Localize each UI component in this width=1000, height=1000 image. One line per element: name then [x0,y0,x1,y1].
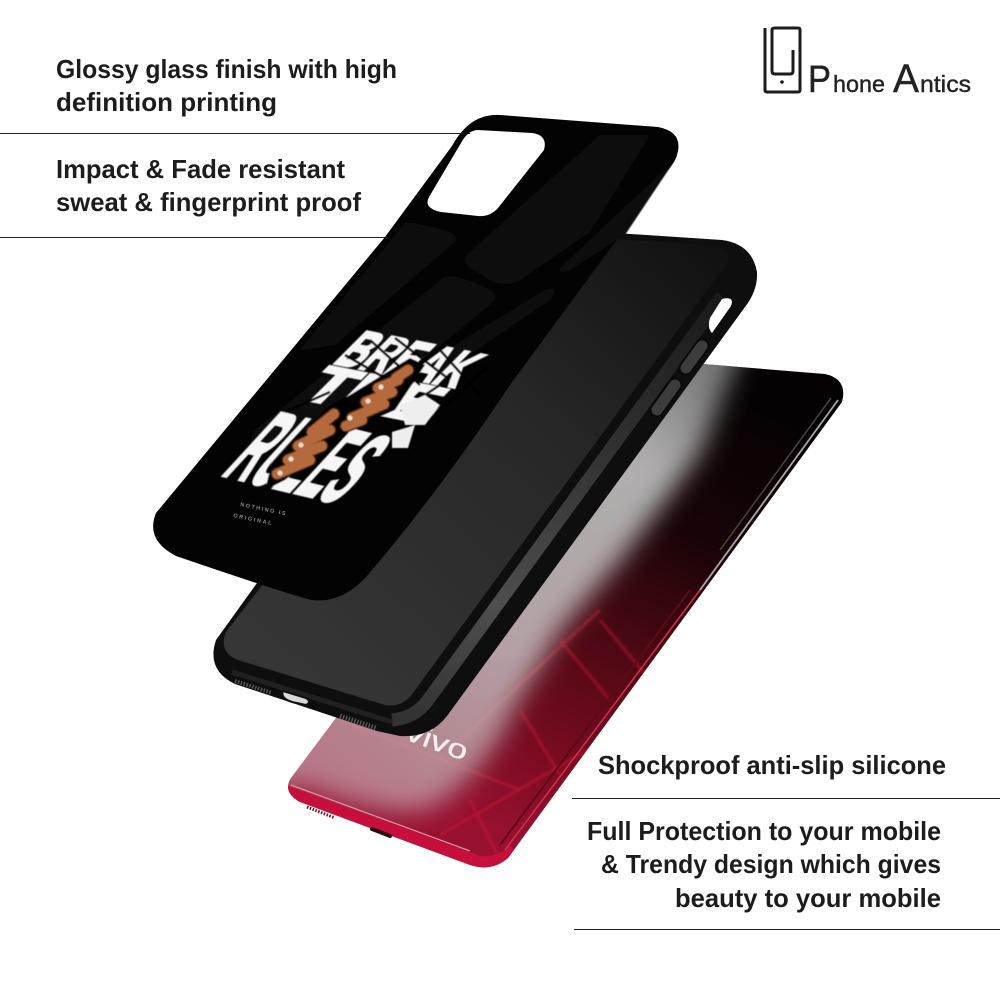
text block: glass finish [56,54,397,117]
scratch marks [285,338,490,420]
logo wordmark: ntics [920,71,971,97]
bottom rim highlight [232,672,392,722]
small caption on case: ORIGINAL [233,513,273,527]
small caption on case: NOTHING IS [240,502,286,517]
text block: shockproof: Shockproof anti-slip silicone [598,750,946,780]
logo wordmark [808,57,971,101]
artwork: break the rules [202,321,497,523]
silver fade overlay [288,364,753,828]
red lip along bottom edge [288,786,514,868]
text block: impact resistance: Impact & Fade resistant [56,154,345,184]
right red edge [506,846,517,860]
text block: glass finish: Glossy glass finish with high [56,54,397,84]
chrome side edge [700,400,838,590]
charge port [282,691,309,705]
screen panel [224,238,729,706]
divider lines [0,134,1000,930]
artwork lettering: BREAK [322,321,497,398]
speaker grille right [340,716,376,728]
logo wordmark: hone [833,71,885,97]
text block: full protection: & Trendy design which gives [601,849,941,879]
logo wordmark: A [893,57,919,101]
text block: impact resistance [56,154,361,217]
logo: Phone Antics [765,28,971,101]
finger nails [278,384,384,476]
charging port [372,829,390,836]
text block: full protection: beauty to your mobile [675,883,941,913]
text block: glass finish: definition printing [56,87,277,117]
text block: full protection [587,816,941,913]
vivo logo: vivo [402,716,472,766]
speaker grille left [235,681,272,693]
power button [657,385,675,410]
top glass case back [153,115,678,600]
small caption on case [233,502,286,527]
volume button [686,346,702,368]
middle bumper case [213,232,757,736]
red phone [288,364,844,868]
artwork lettering [202,321,497,523]
black tear [265,358,425,490]
faint panels on case [251,135,675,450]
rim highlight [392,296,722,720]
text block: impact resistance: sweat & fingerprint proof [56,187,361,217]
fists [277,370,408,474]
white debris [392,395,440,448]
red diagonal pattern [440,608,646,854]
speaker dots [307,807,335,818]
camera cutout [709,298,732,333]
icon: phone outline [765,28,800,92]
logo wordmark: P [808,59,831,101]
artwork lettering: THE [287,356,462,433]
text block: full protection: Full Protection to your mobile [587,816,941,846]
artwork lettering: RULES [202,393,414,523]
